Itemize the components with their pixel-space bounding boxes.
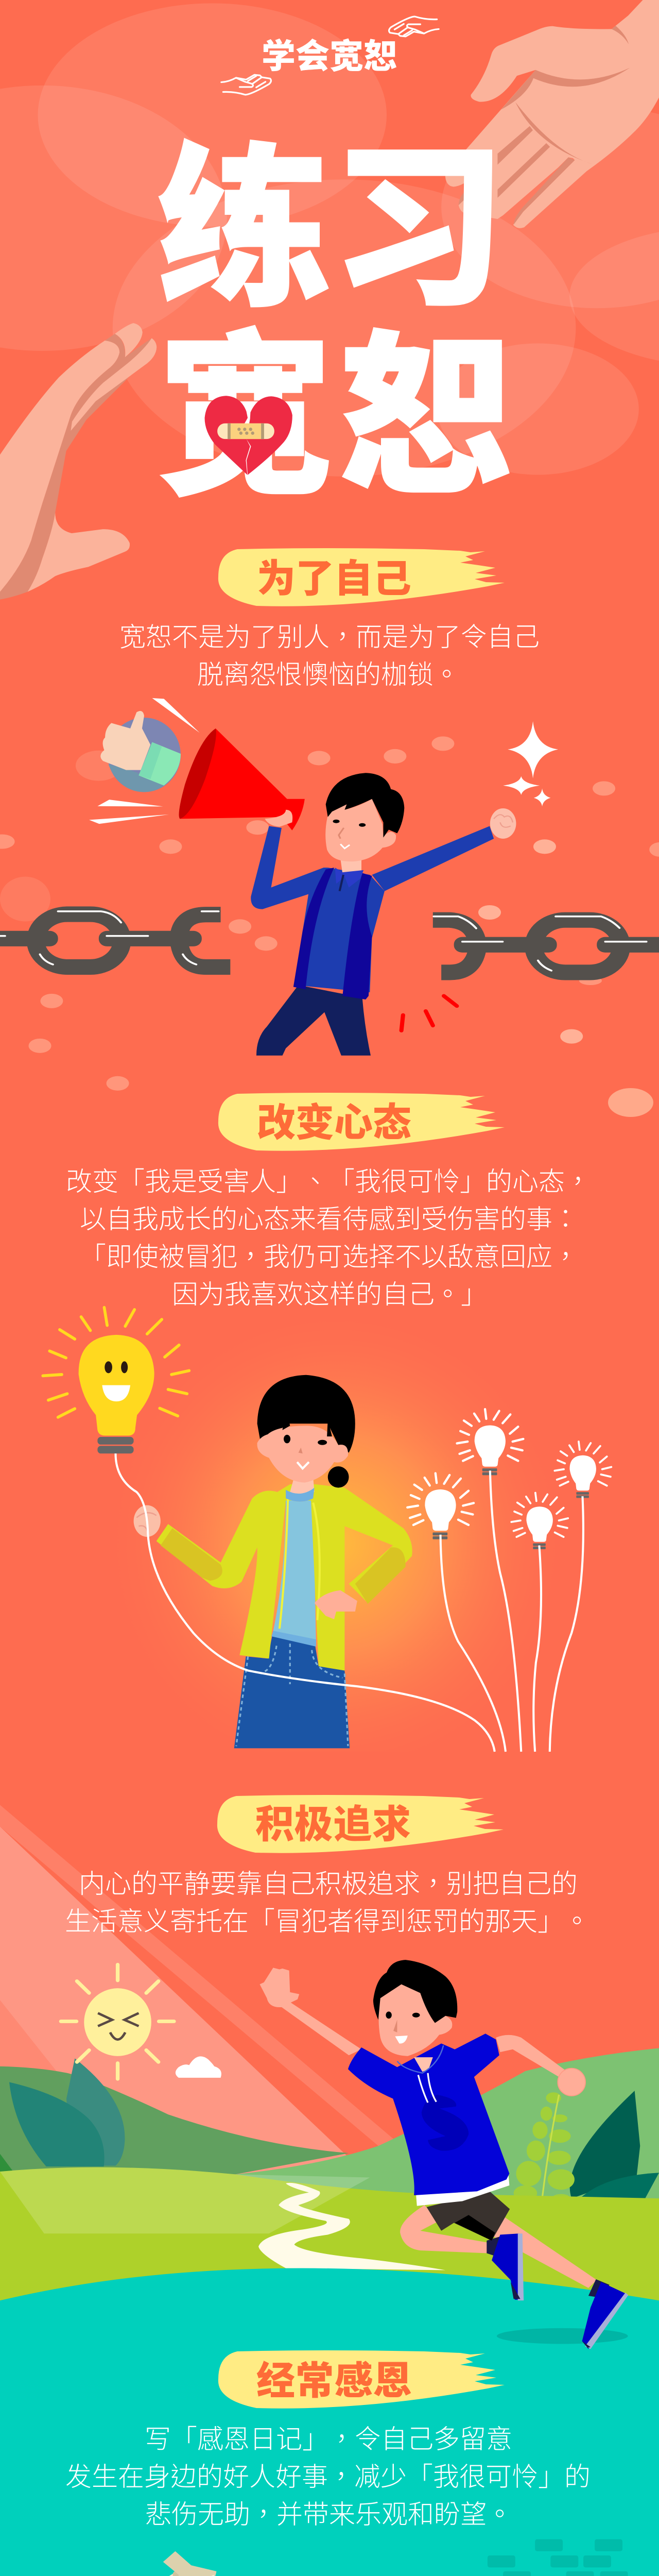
heading banner	[218, 1091, 505, 1151]
teal background	[0, 2349, 659, 2576]
wires	[115, 1453, 583, 1752]
icon: cloud	[176, 2056, 221, 2078]
icon: reaching hand bottom left	[0, 323, 157, 600]
leaves left	[9, 2058, 125, 2166]
heading banner	[218, 547, 505, 606]
body text: 发生在身边的好人好事，减少「我很可怜」的	[65, 2455, 591, 2494]
wall bricks	[239, 2539, 628, 2576]
impact marks	[402, 996, 457, 1030]
illustration: man with megaphone breaking chain	[0, 698, 659, 1091]
body text: 脱离怨恨懊恼的枷锁。	[197, 653, 460, 691]
plant right	[514, 2091, 659, 2201]
lamp	[91, 2551, 216, 2576]
heading banner	[217, 1793, 504, 1853]
icon: small hand mirrored	[221, 75, 271, 95]
panel: for yourself	[0, 547, 659, 1091]
body text: 因为我喜欢这样的自己。」	[172, 1273, 487, 1311]
spots	[0, 736, 659, 1091]
heading banner	[218, 2349, 505, 2409]
path	[258, 2183, 445, 2270]
icon: white bulbs	[407, 1409, 611, 1549]
landscape	[0, 1805, 659, 2370]
body text: 写「感恩日记」，令自己多留意	[145, 2418, 512, 2456]
panel: hero	[0, 0, 659, 600]
icon: yellow bulb	[43, 1308, 189, 1453]
body text: 改变「我是受害人」、「我很可怜」的心态，	[66, 1160, 591, 1198]
panel: change mindset	[0, 1088, 659, 1752]
background blobs	[0, 3, 659, 477]
body text	[65, 2418, 591, 2531]
heading banner: 经常感恩	[256, 2349, 412, 2405]
body text	[66, 1160, 591, 1311]
ground	[0, 2167, 659, 2370]
glow	[0, 1296, 659, 1752]
title	[158, 89, 520, 529]
spot decoration	[608, 1088, 653, 1117]
megaphone	[179, 728, 305, 831]
hills	[0, 2066, 349, 2174]
runner	[259, 1960, 628, 2349]
heading banner: 为了自己	[257, 547, 411, 603]
heading banner: 改变心态	[257, 1091, 411, 1147]
body text: 以自我成长的心态来看待感到受伤害的事：	[80, 1198, 579, 1236]
panel: gratitude	[0, 2349, 659, 2576]
icon: reaching hand top right	[445, 0, 659, 228]
body text: 「即使被冒犯，我仍可选择不以敌意回应，	[80, 1235, 579, 1274]
icon: sun	[61, 1964, 174, 2079]
chains	[0, 911, 659, 972]
body text	[119, 616, 540, 691]
heading banner: 积极追求	[255, 1793, 411, 1849]
man	[251, 773, 516, 1056]
body text: 宽恕不是为了别人，而是为了令自己	[119, 616, 540, 654]
speed lines	[89, 698, 200, 824]
illustration: girl writing at desk	[29, 2539, 639, 2576]
body text: 生活意义寄托在「冒犯者得到惩罚的那天」。	[65, 1900, 590, 1938]
icon: thumbs up	[100, 711, 181, 792]
title line 1: 练习	[158, 89, 506, 341]
icon: bandaged heart	[204, 396, 292, 475]
body text: 悲伤无助，并带来乐观和盼望。	[145, 2493, 513, 2531]
woman	[134, 1375, 412, 1748]
teal ground	[0, 2268, 659, 2370]
panel: active pursuit	[0, 1793, 659, 2370]
title line 2: 宽恕	[158, 275, 520, 529]
icon: sparkles	[503, 721, 558, 806]
sun rays	[0, 1805, 420, 2233]
illustration: woman holding bulb	[0, 1296, 659, 1752]
body text: 内心的平静要靠自己积极追求，别把自己的	[79, 1862, 578, 1901]
body text	[65, 1862, 590, 1938]
icon: small hand	[389, 16, 439, 37]
subtitle: 学会宽恕	[262, 29, 397, 78]
